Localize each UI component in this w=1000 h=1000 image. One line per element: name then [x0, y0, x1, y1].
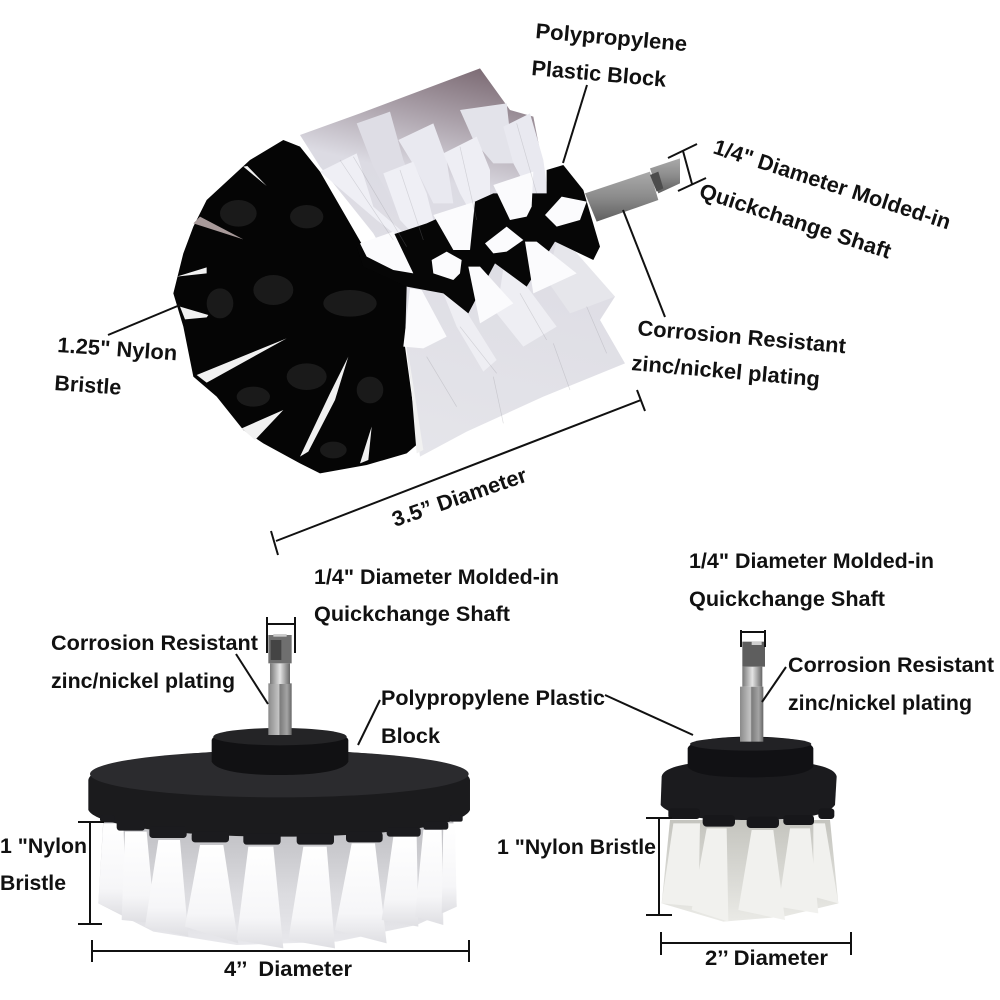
leader: nylon bristle — [108, 305, 180, 335]
knobs — [668, 808, 834, 828]
top brush labels: zinc/nickel plating — [631, 351, 821, 391]
left brush labels: Block — [381, 724, 440, 748]
right brush labels: Quickchange Shaft — [689, 587, 885, 611]
leader: corrosion — [762, 667, 786, 702]
label: bristle: 1 "Nylon — [0, 834, 87, 858]
label: shaft: 1/4" Diameter Molded-in — [710, 135, 954, 234]
leader: corrosion — [236, 654, 268, 704]
dimension: 1 inch bristle — [646, 818, 672, 915]
left brush dimension lines — [78, 617, 469, 962]
shaft — [268, 634, 292, 735]
shaft of top brush — [585, 158, 680, 222]
hub — [688, 737, 813, 777]
right brush dimension lines — [605, 630, 851, 955]
label: corrosion: Corrosion Resistant — [788, 653, 994, 677]
bristle tufts — [662, 823, 838, 922]
label: corrosion: Corrosion Resistant — [637, 316, 847, 358]
knobs — [100, 815, 463, 845]
left brush labels: Bristle — [0, 871, 66, 895]
top brush labels: Quickchange Shaft — [696, 179, 894, 264]
top brush labels: Bristle — [54, 371, 122, 400]
label: 2 inch: 2’’ Diameter — [705, 946, 829, 970]
label: bristle: 1.25" Nylon — [57, 333, 178, 365]
label: shaft: 1/4" Diameter Molded-in — [689, 549, 934, 573]
left brush labels: zinc/nickel plating — [51, 669, 235, 693]
white bristle body — [300, 68, 625, 457]
bristle streaks — [340, 123, 607, 423]
top brush dimension lines — [108, 85, 706, 555]
label: 3.5 diameter: 3.5” Diameter — [389, 463, 531, 532]
left brush labels: Quickchange Shaft — [314, 602, 510, 626]
front white tufts — [360, 172, 587, 348]
black hub band — [357, 165, 600, 313]
leader: plastic block — [563, 85, 587, 163]
right brush labels: zinc/nickel plating — [788, 691, 972, 715]
bristle background — [98, 820, 457, 945]
disc — [661, 760, 837, 820]
shaft — [740, 642, 765, 742]
label: corrosion: Corrosion Resistant — [51, 631, 258, 655]
dimension: 4 inch — [92, 940, 469, 962]
dimension: 2 inch — [661, 932, 851, 955]
dimension: 1 inch bristle — [78, 822, 104, 924]
bracket: shaft — [267, 617, 295, 653]
left brush: 4 inch flat — [88, 634, 470, 948]
bristle tufts — [98, 823, 457, 948]
leader: block — [605, 695, 693, 735]
label: polypropylene block: Polypropylene — [535, 19, 688, 56]
dimension: 3.5 inch — [271, 390, 645, 555]
bracket: shaft — [741, 630, 765, 647]
leader: block — [358, 700, 380, 745]
label: block: Polypropylene Plastic — [381, 686, 605, 710]
lower white tufts behind hub — [443, 242, 615, 372]
label: shaft: 1/4" Diameter Molded-in — [314, 565, 559, 589]
bracket: shaft diameter — [668, 144, 706, 191]
disc — [88, 750, 470, 837]
speckles and bristle gaps on dome — [177, 166, 423, 463]
back row white tufts — [320, 103, 548, 248]
label: bristle: 1 "Nylon Bristle — [497, 835, 656, 859]
right brush: 2 inch flat — [661, 642, 838, 922]
top brush: round nylon drill brush — [173, 68, 680, 473]
label: 4 inch: 4’’ Diameter — [224, 957, 353, 981]
top brush labels: Plastic Block — [531, 56, 667, 92]
bristle background — [662, 820, 838, 922]
right brush labels — [497, 549, 994, 970]
top brush labels — [54, 19, 954, 532]
hub — [212, 728, 348, 775]
black bristle dome — [173, 140, 418, 473]
left brush labels — [0, 565, 605, 981]
leader: corrosion resistant — [623, 210, 665, 317]
